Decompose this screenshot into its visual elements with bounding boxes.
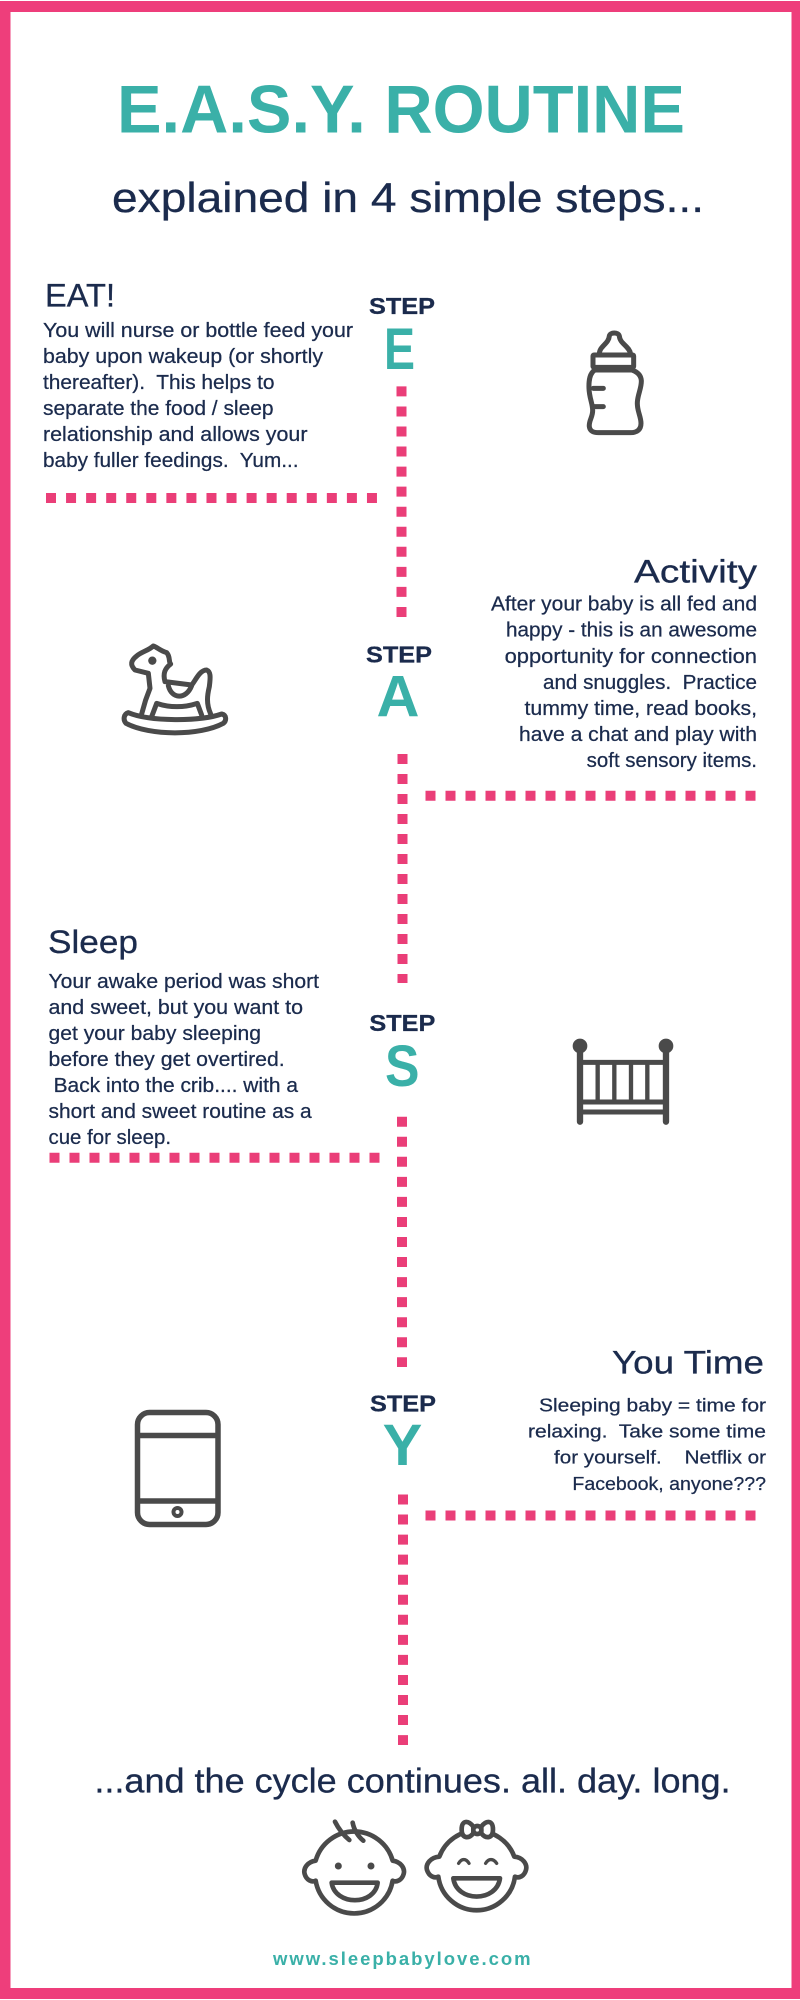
step marker: A: STEP	[366, 642, 432, 668]
dotted connector: eat	[46, 493, 378, 503]
panel: sleep	[48, 924, 380, 1158]
dotted connector: activity	[426, 791, 756, 801]
text block: eat description: baby upon wakeup (or shortly	[43, 346, 323, 368]
dotted connector: sleep	[50, 1153, 380, 1163]
text block: you time description: for yourself. Netflix or	[554, 1447, 766, 1468]
step marker: S	[369, 1010, 435, 1099]
text block: sleep description: cue for sleep.	[48, 1127, 171, 1149]
text block: eat description: relationship and allows your	[43, 424, 308, 446]
icon: baby boy face	[304, 1822, 404, 1913]
icon: baby bottle	[589, 333, 641, 433]
step marker: A	[366, 642, 432, 730]
closing line: ...and the cycle continues. all. day. long.	[94, 1762, 731, 1800]
dotted timeline: S to Y	[397, 1117, 407, 1367]
step marker: E: E	[384, 317, 415, 382]
step marker: S: S	[385, 1034, 420, 1099]
icon: rocking horse	[124, 646, 226, 733]
subtitle: explained in 4 simple steps...	[112, 174, 704, 221]
step marker: Y: Y	[383, 1413, 422, 1478]
text block: sleep description	[48, 971, 319, 1149]
dotted timeline: A to S	[398, 754, 408, 983]
icon: smartphone	[138, 1412, 218, 1524]
text block: eat description: baby fuller feedings. Yum...	[43, 450, 298, 472]
text block: eat description	[43, 320, 353, 472]
text block: sleep description: Your awake period was short	[48, 971, 319, 993]
text block: activity description: opportunity for connection	[505, 646, 757, 668]
step marker: E: STEP	[369, 293, 435, 319]
step marker: A: A	[376, 665, 420, 730]
step marker: Y: STEP	[370, 1390, 436, 1416]
heading: eat: EAT!	[45, 278, 115, 314]
heading: activity: Activity	[634, 554, 757, 590]
text block: activity description: After your baby is all fed and	[491, 594, 757, 616]
dotted timeline: E to A	[396, 386, 406, 617]
panel: you time	[426, 1344, 766, 1516]
text block: sleep description: before they get overtired.	[48, 1049, 285, 1071]
text block: you time description	[528, 1394, 766, 1494]
heading: you time: You Time	[612, 1344, 764, 1380]
step marker: S: STEP	[369, 1010, 435, 1036]
dotted timeline: Y to end	[398, 1494, 408, 1745]
panel: eat	[43, 278, 378, 498]
text block: activity description: soft sensory items.	[587, 750, 757, 772]
text block: eat description: You will nurse or bottle feed your	[43, 320, 353, 342]
icon: crib	[573, 1039, 673, 1122]
text block: you time description: Sleeping baby = time for	[539, 1394, 766, 1416]
panel: activity	[426, 554, 757, 796]
icon: baby girl face	[427, 1822, 526, 1910]
heading: sleep: Sleep	[48, 924, 138, 960]
step marker: Y	[370, 1390, 436, 1478]
text block: activity description: happy - this is an awesome	[506, 620, 757, 642]
text block: activity description: and snuggles. Practice	[543, 672, 757, 694]
text block: eat description: separate the food / sleep	[43, 398, 274, 420]
text block: sleep description: Back into the crib.... with a	[54, 1075, 299, 1097]
text block: sleep description: get your baby sleeping	[48, 1023, 261, 1045]
title: E.A.S.Y. ROUTINE	[117, 72, 685, 148]
text block: activity description	[491, 594, 757, 772]
text block: activity description: tummy time, read books,	[524, 698, 757, 720]
text block: you time description: relaxing. Take some time	[528, 1421, 766, 1442]
text block: you time description: Facebook, anyone???	[572, 1473, 766, 1494]
text block: sleep description: and sweet, but you want to	[48, 997, 303, 1019]
text block: sleep description: short and sweet routine as a	[48, 1101, 313, 1123]
text block: eat description: thereafter). This helps to	[43, 372, 274, 394]
dotted connector: you time	[426, 1510, 756, 1520]
step marker: E	[369, 293, 435, 382]
text block: activity description: have a chat and play with	[519, 724, 757, 746]
website footer: www.sleepbabylove.com	[272, 1948, 531, 1969]
